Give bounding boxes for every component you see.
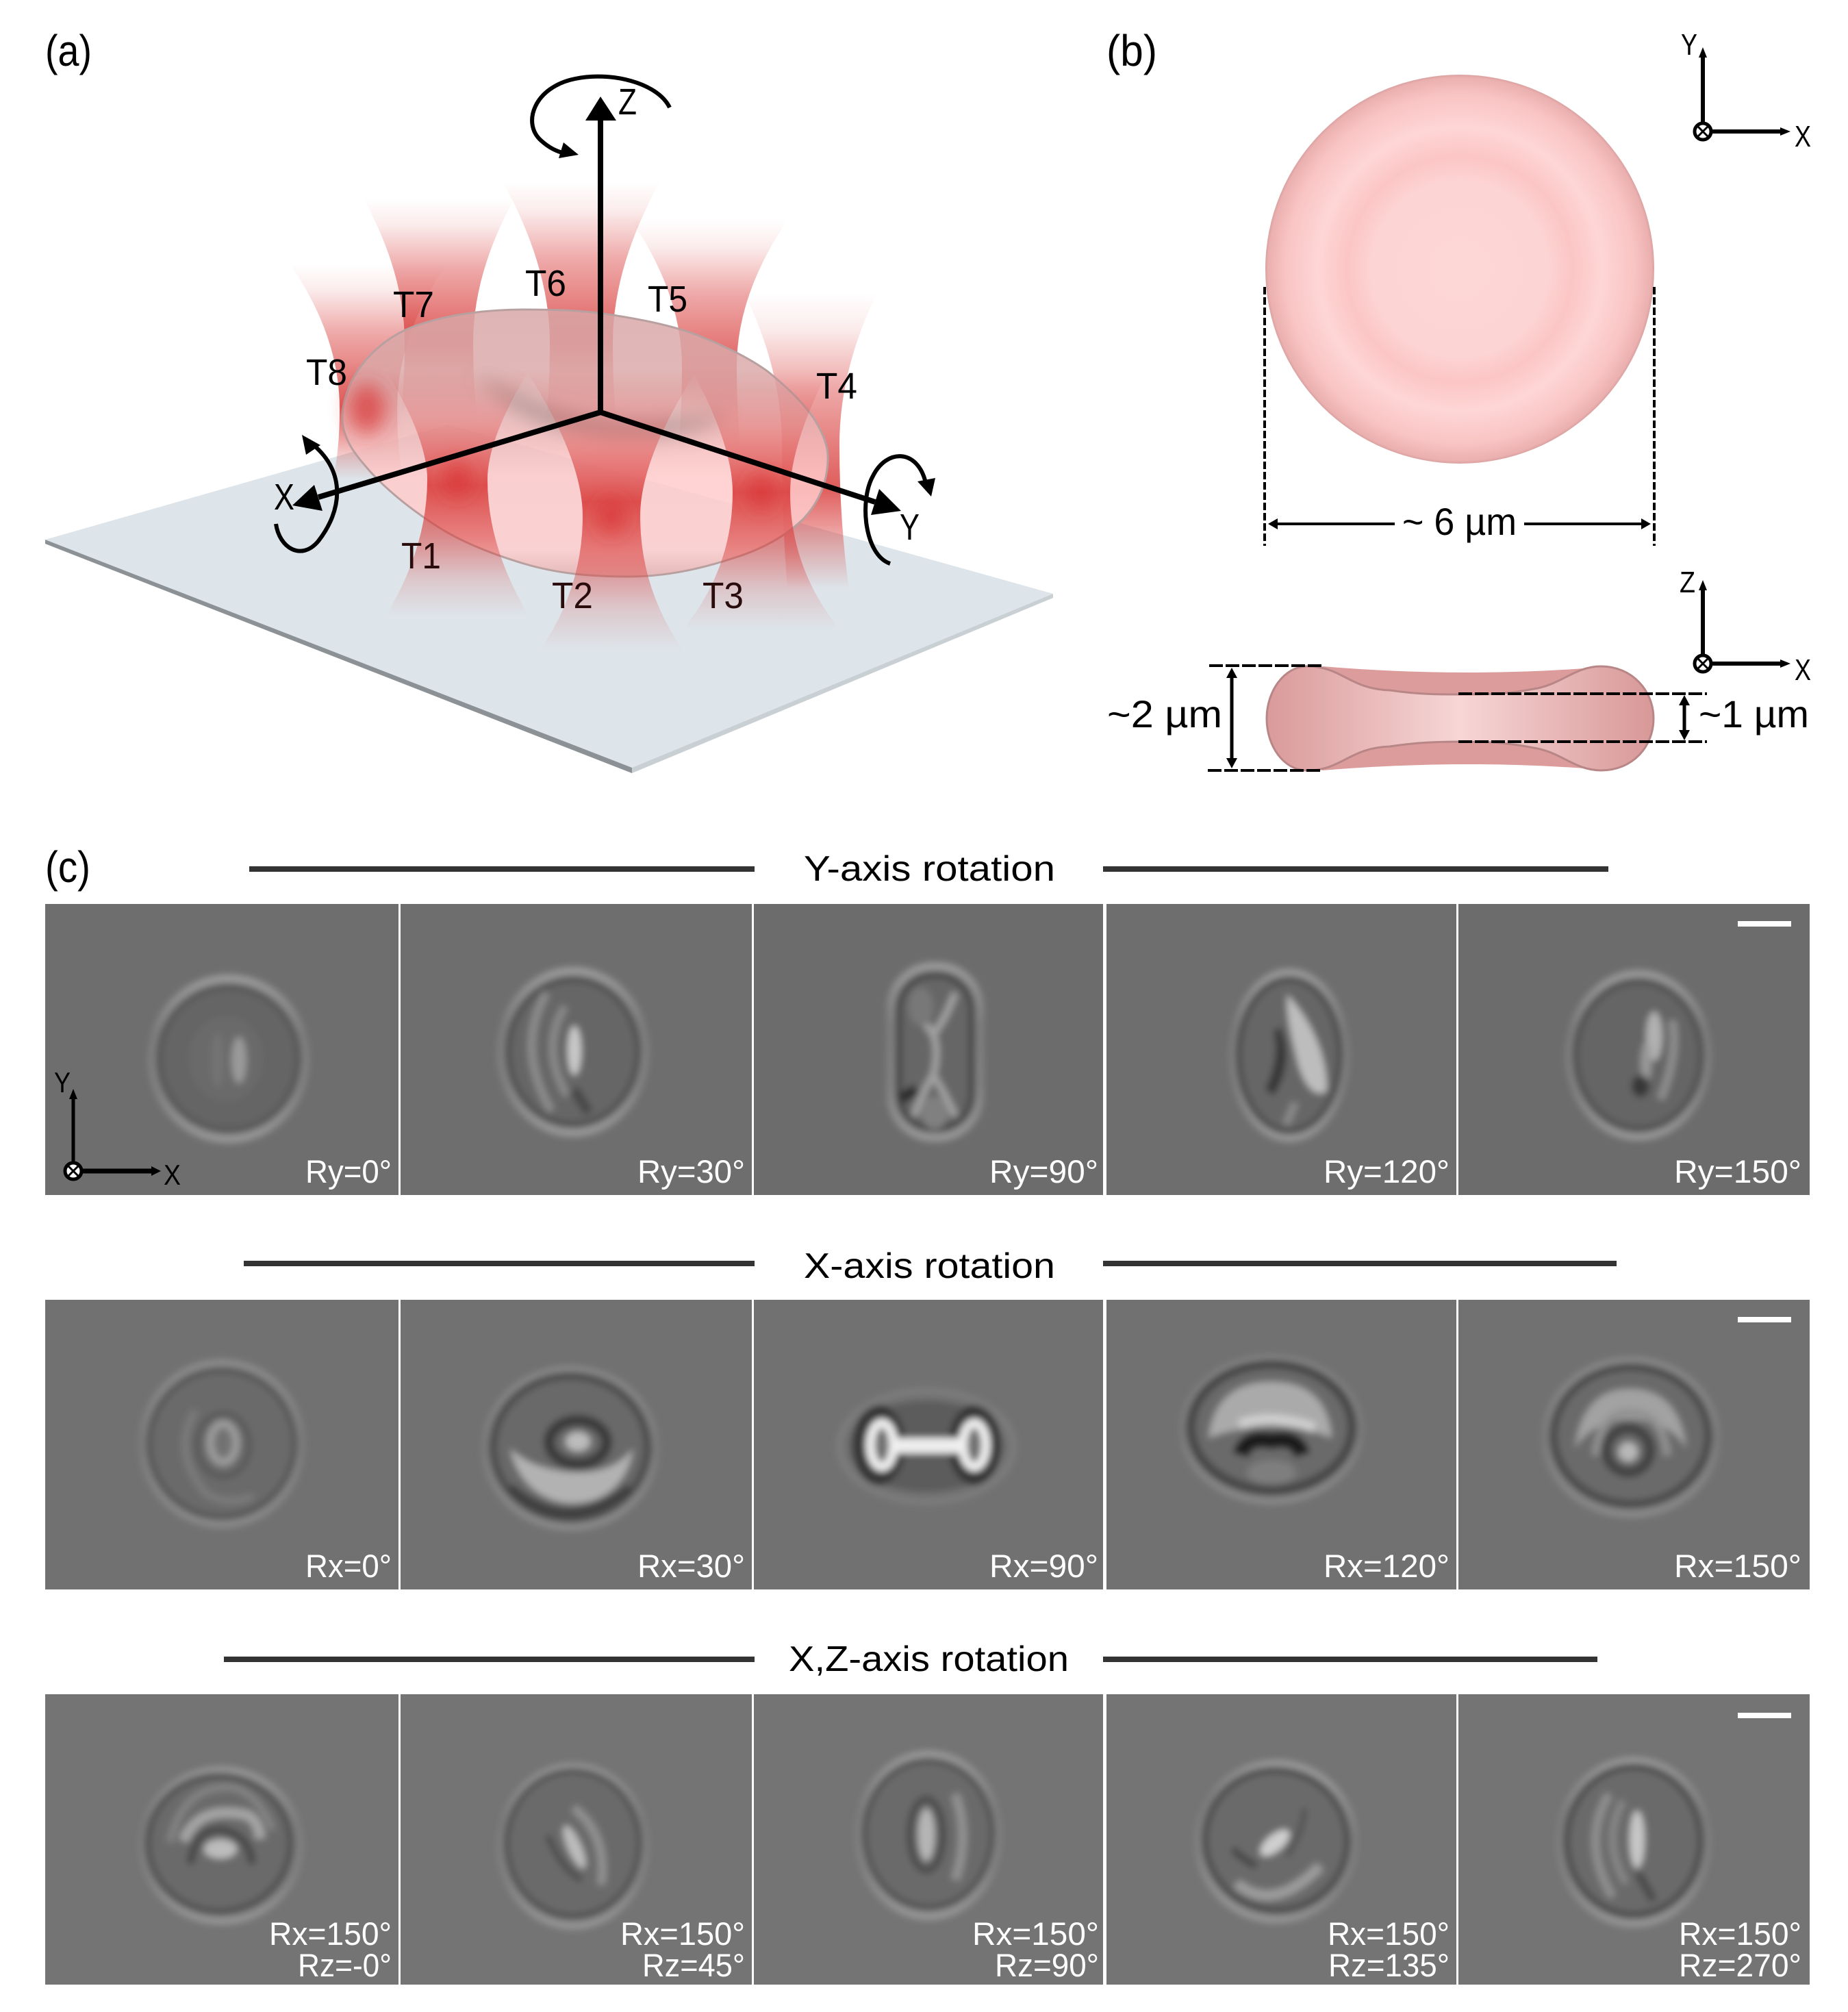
image: Rx=150 Rz=45: Rz=45° [642, 1947, 745, 1983]
heading: Y-axis rotation: Y-axis rotation [804, 849, 1055, 889]
6 micron dimension: ~ 6 µm [1402, 500, 1517, 543]
side view of cell [1267, 666, 1654, 770]
2 micron dimension: ~2 µm [1107, 692, 1222, 735]
image: Rx=150 Rz=135 [1106, 1694, 1456, 1985]
image: Ry=120 [1106, 904, 1456, 1195]
2 micron dimension [1107, 666, 1322, 770]
image: Rx=150 Rz=45: Rx=150° [620, 1915, 745, 1952]
row: X,Z-axis rotation [45, 1639, 1810, 1985]
image: Rx=150 [1458, 1300, 1810, 1589]
image: Ry=0 [45, 904, 398, 1195]
row: X-axis rotation [45, 1246, 1810, 1589]
panel label (b): (b) [1106, 26, 1157, 75]
image: Rx=150 Rz=90 [754, 1694, 1103, 1985]
image: Ry=120: Ry=120° [1324, 1153, 1450, 1190]
back trap beams T4 to T8 [290, 181, 877, 589]
red blood cell torus [342, 310, 828, 577]
side view axes [1680, 566, 1811, 687]
image: Ry=30: Ry=30° [637, 1153, 745, 1190]
side view axes: X [1795, 653, 1811, 687]
image: Ry=150 [1458, 904, 1810, 1195]
top view axes [1681, 28, 1811, 153]
panel label (c): (c) [45, 842, 90, 892]
side view axes: Z [1680, 566, 1695, 599]
beam and axis labels: T3 [703, 575, 744, 616]
image: Rx=90 [754, 1300, 1103, 1589]
heading: X,Z-axis rotation: X,Z-axis rotation [789, 1639, 1069, 1679]
image: Rx=0: Rx=0° [305, 1548, 392, 1584]
top view axes: Y [1681, 28, 1697, 62]
image: Ry=30 [401, 904, 752, 1195]
rotation arrow about X [276, 435, 337, 551]
beam and axis labels: X [274, 477, 294, 518]
scale bar [1738, 921, 1791, 927]
image: Ry=0: Ry=0° [305, 1153, 392, 1190]
beam and axis labels: Y [900, 507, 920, 548]
scale bar [1738, 1317, 1791, 1322]
image: Ry=90 [754, 904, 1103, 1195]
image: Rx=150 Rz=-0: Rx=150° [269, 1915, 392, 1952]
1 micron dimension: ~1 µm [1699, 692, 1809, 735]
beam and axis labels: T2 [552, 575, 593, 616]
image: Ry=90: Ry=90° [989, 1153, 1098, 1190]
1 micron dimension [1458, 692, 1809, 742]
image: Rx=90: Rx=90° [989, 1548, 1098, 1584]
image: Rx=120: Rx=120° [1324, 1548, 1450, 1584]
beam and axis labels [274, 81, 920, 616]
heading: X,Z-axis rotation [224, 1639, 1597, 1679]
image: Rx=150 Rz=45 [401, 1694, 752, 1985]
panel: (a) trap geometry [45, 26, 1053, 773]
panel label (a): (a) [45, 26, 92, 75]
image: Rx=150 Rz=270 [1458, 1694, 1810, 1985]
image: Rx=30: Rx=30° [637, 1548, 745, 1584]
image: Rx=150 Rz=-0 [45, 1694, 398, 1985]
beam and axis labels: T1 [401, 536, 441, 577]
image axes: X [164, 1159, 181, 1191]
image: Rx=150 Rz=135: Rx=150° [1328, 1915, 1450, 1952]
image: Rx=150 Rz=90: Rz=90° [995, 1947, 1099, 1983]
beam and axis labels: T4 [816, 366, 857, 407]
image axes: Y [54, 1066, 71, 1098]
beam and axis labels: T6 [525, 263, 566, 304]
front trap beams T1 to T3 [385, 370, 840, 651]
heading: X-axis rotation [244, 1246, 1617, 1286]
image: Rx=150 Rz=90: Rx=150° [972, 1915, 1099, 1952]
row: Y-axis rotation [45, 849, 1810, 1195]
beam and axis labels: T8 [306, 352, 347, 393]
panel: (b) cell dimensions [1106, 26, 1811, 770]
image: Rx=30 [401, 1300, 752, 1589]
image: Ry=150: Ry=150° [1674, 1153, 1801, 1190]
glass substrate plate [45, 425, 1053, 773]
image: Rx=0 [45, 1300, 398, 1589]
beam and axis labels: T7 [393, 284, 434, 325]
beam and axis labels: Z [618, 81, 637, 123]
scale bar [1738, 1713, 1791, 1718]
XYZ axes [292, 97, 901, 515]
rotation arrow about Z [532, 77, 670, 158]
image: Rx=150 Rz=270: Rz=270° [1679, 1947, 1801, 1983]
image: Rx=150 Rz=270: Rx=150° [1679, 1915, 1801, 1952]
top view of cell [1265, 75, 1654, 464]
image: Rx=150: Rx=150° [1674, 1548, 1801, 1584]
top view axes: X [1795, 120, 1811, 153]
heading: Y-axis rotation [249, 849, 1608, 889]
torus dimple shading [479, 373, 726, 436]
heading: X-axis rotation: X-axis rotation [804, 1246, 1055, 1286]
image: Rx=150 Rz=135: Rz=135° [1328, 1947, 1450, 1983]
image: Rx=150 Rz=-0: Rz=-0° [298, 1947, 392, 1983]
rotation arrow about Y [865, 456, 935, 564]
beam and axis labels: T5 [648, 279, 687, 320]
image: Rx=120 [1106, 1300, 1456, 1589]
image axes [54, 1066, 181, 1191]
6 micron dimension [1265, 287, 1654, 546]
